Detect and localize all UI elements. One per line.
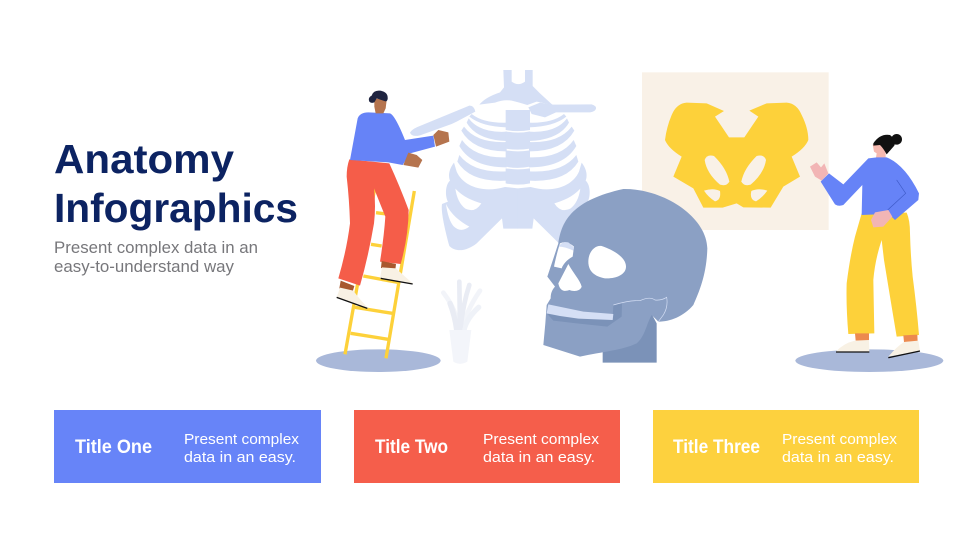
figure: man on ladder [316,91,449,372]
pointing hand [810,162,828,181]
card: title one: Title One [75,437,152,458]
card: title three: data in an easy. [782,449,894,466]
pants [338,159,409,286]
card: title three: Title Three [673,437,760,458]
left clavicle [410,106,475,136]
subtitle: easy-to-understand way [54,258,235,276]
pot [449,330,471,364]
plant [443,282,480,364]
card: title two: Present complex [483,431,600,448]
ankles [855,333,918,342]
shoes [836,340,920,357]
title [54,136,298,231]
shirt [350,91,449,168]
title: Infographics [54,185,298,231]
nose [558,264,582,291]
hair [873,135,895,154]
ladder [345,187,414,358]
card: title three [653,410,919,483]
ground ellipse [316,349,441,372]
pelvis bone [665,103,808,208]
title: Anatomy [54,136,234,182]
card: title one: Present complex [184,431,300,448]
eye socket right [588,246,626,278]
card: title one [54,410,321,483]
pelvis openings [704,155,767,201]
neck [603,314,657,363]
subtitle: Present complex data in an [54,239,258,257]
card: title three: Present complex [782,431,898,448]
sternum [506,110,530,185]
neck and face [374,98,387,113]
teeth [547,304,613,320]
skull [543,189,707,363]
hair [369,91,388,103]
neck and face [873,143,886,158]
figure: woman presenting [795,134,943,372]
suture line [613,297,667,322]
card: title one: data in an easy. [184,449,296,466]
eye socket left [554,242,574,268]
pants [847,213,919,337]
right clavicle [528,103,596,117]
subtitle [54,239,258,276]
hands [403,130,449,168]
poster with pelvis [642,72,829,230]
shoes [337,267,413,308]
shirt [821,157,919,220]
card: title two: Title Two [375,437,448,458]
card: title two [354,410,620,483]
cranium and jaw [543,189,707,357]
hip hand [871,210,892,227]
trachea and collar [479,70,553,105]
leaves [443,282,480,330]
illustration: rib cage skeleton [410,70,596,250]
ankles [339,261,396,292]
card: title two: data in an easy. [483,449,595,466]
upper jaw shadow [547,303,622,327]
ground ellipse [795,349,943,372]
